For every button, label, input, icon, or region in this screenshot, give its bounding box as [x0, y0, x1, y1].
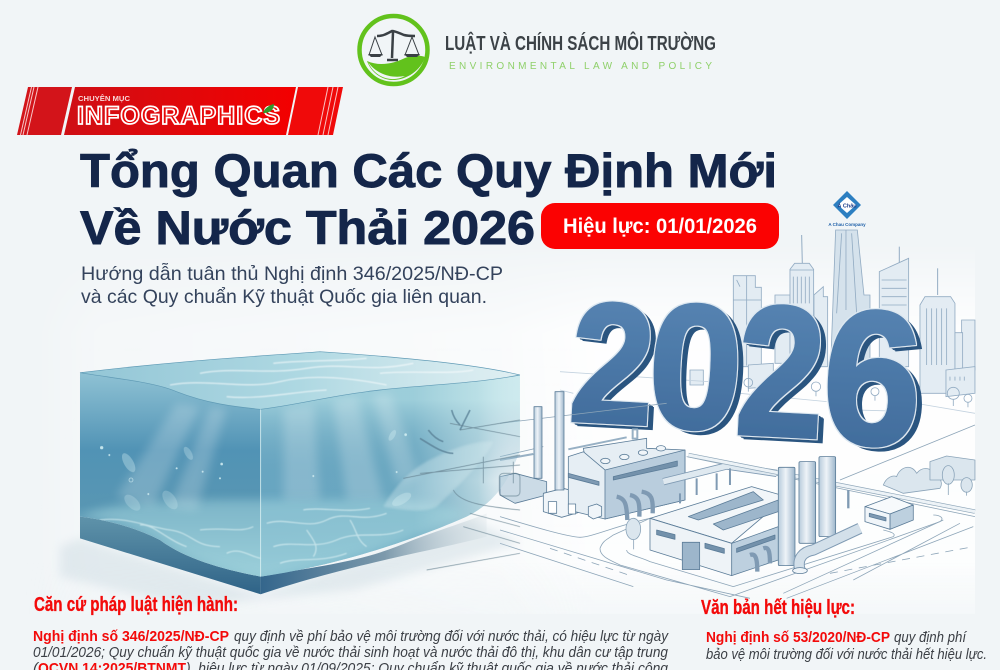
legal basis paragraph: quy định về phí bảo vệ môi trường đối với nước thải, có hiệu lực từ ngày	[234, 628, 669, 645]
legal basis heading: Căn cứ pháp luật hiện hành:	[34, 594, 238, 616]
shed	[865, 497, 913, 529]
large 2026 numerals: 0	[644, 267, 747, 468]
right sand face	[261, 513, 487, 594]
bubbles and plankton	[100, 429, 413, 513]
right water face	[261, 375, 520, 577]
front vertical edge	[259, 409, 262, 577]
banner left piece	[17, 87, 72, 135]
factory illustration	[500, 392, 975, 598]
icon: green leaf	[263, 104, 274, 113]
title line 2: Về Nước Thải 2026	[80, 202, 535, 255]
title line 1: Tổng Quan Các Quy Định Mới	[80, 145, 777, 198]
legal basis paragraph	[33, 628, 669, 670]
large 2026 numerals: 6	[818, 269, 927, 486]
logo tagline: ENVIRONMENTAL LAW AND POLICY	[449, 61, 712, 72]
tree cluster	[626, 456, 975, 549]
expired documents section	[701, 597, 987, 663]
legal basis paragraph: 01/01/2026; Quy chuẩn kỹ thuật quốc gia về nước thải sinh hoạt và nước thải đô thị, khu dân cư tập trung	[33, 644, 669, 661]
subtitle: Hướng dẫn tuân thủ Nghị định 346/2025/NĐ-CP	[81, 262, 503, 285]
process plant B	[650, 457, 860, 576]
expired documents paragraph: quy định phí	[894, 629, 968, 646]
banner title: INFOGRAPHICS	[77, 102, 280, 130]
surface ripples	[170, 358, 473, 397]
water surface	[80, 352, 520, 409]
left sand face	[80, 517, 261, 594]
water block illustration	[60, 352, 520, 607]
water interior effects	[80, 393, 467, 577]
subtitle: và các Quy chuẩn Kỹ thuật Quốc gia liên quan.	[81, 286, 487, 308]
logo emblem: green ring, leaf and scales	[360, 16, 428, 84]
large 2026 numerals: 2	[566, 266, 659, 460]
large 2026 numerals	[566, 266, 927, 486]
legal basis section	[33, 594, 669, 670]
aquatic plants	[420, 410, 470, 453]
light rays	[117, 393, 420, 510]
illustration background haze	[500, 302, 975, 592]
effective date badge	[541, 203, 779, 249]
process plant A	[500, 392, 975, 520]
legal basis paragraph: Nghị định số 346/2025/NĐ-CP	[33, 628, 229, 645]
subtitle	[81, 262, 503, 308]
blueprint lines	[403, 420, 520, 570]
water floor glow	[80, 500, 467, 577]
ground roads	[500, 403, 975, 598]
banner main panel	[64, 87, 296, 135]
expired documents heading: Văn bản hết hiệu lực:	[701, 597, 855, 619]
expired documents paragraph: Nghị định số 53/2020/NĐ-CP	[706, 629, 890, 646]
logo wordmark: LUẬT VÀ CHÍNH SÁCH MÔI TRƯỜNG	[445, 31, 716, 55]
company logo: A Chau: A Chau Company	[828, 222, 866, 227]
company logo: A Chau	[828, 191, 866, 227]
banner label: CHUYÊN MỤC	[78, 94, 131, 103]
infographics banner	[17, 87, 343, 135]
dissolving wave to blueprint	[383, 441, 493, 510]
left water face	[80, 373, 261, 577]
large 2026 numerals: 2	[732, 267, 830, 477]
logo	[360, 16, 716, 84]
company logo: A Chau: Á Châu	[837, 202, 857, 210]
city skyline	[560, 230, 975, 413]
title	[80, 145, 777, 255]
caustic light network	[100, 508, 403, 563]
banner right piece	[288, 87, 343, 135]
effective date badge: Hiệu lực: 01/01/2026	[563, 215, 757, 238]
ground shadow	[60, 520, 520, 607]
expired documents paragraph	[706, 629, 987, 663]
